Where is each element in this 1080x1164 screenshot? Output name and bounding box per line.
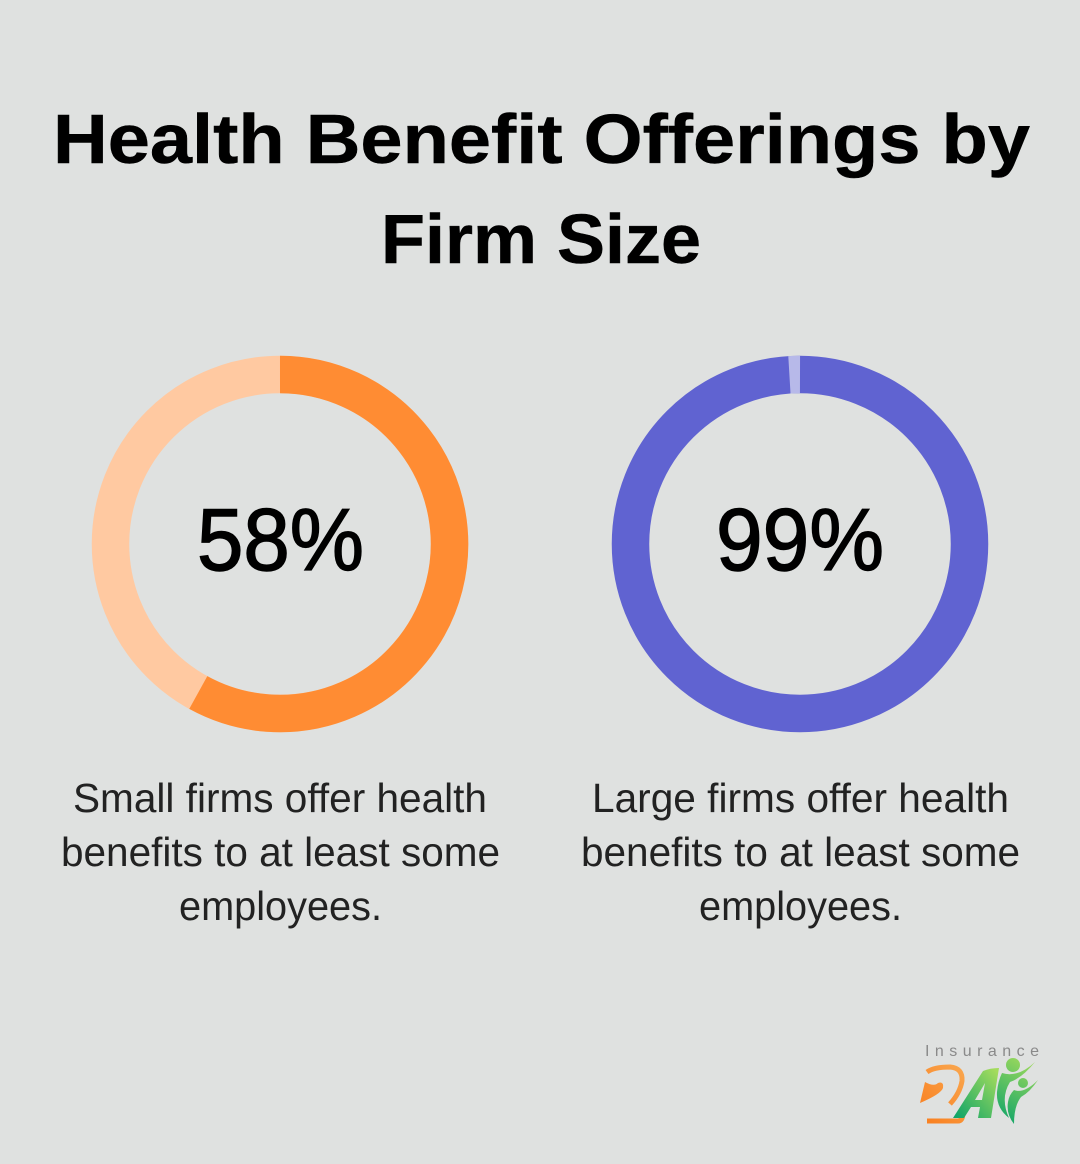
- stat: 58%: 58%: [197, 490, 364, 589]
- description: small firms: benefits to at least some: [61, 829, 500, 875]
- logo: Insurance 2A: Insurance: [925, 1043, 1039, 1060]
- description: small firms: employees.: [179, 883, 382, 929]
- title: [53, 100, 1030, 278]
- description: large firms: [581, 775, 1020, 929]
- title: Health Benefit Offerings by: [53, 100, 1030, 178]
- title: Firm Size: [381, 200, 701, 278]
- donut chart: 58%: [110, 374, 450, 714]
- description: large firms: employees.: [699, 883, 902, 929]
- description: large firms: Large firms offer health: [592, 775, 1009, 821]
- logo: Insurance 2A: [920, 1043, 1039, 1124]
- panel: large firms: [581, 374, 1020, 929]
- stat: 99%: 99%: [716, 490, 884, 589]
- panel: small firms: [61, 374, 500, 929]
- description: large firms: benefits to at least some: [581, 829, 1020, 875]
- description: small firms: Small firms offer health: [73, 775, 487, 821]
- donut chart: 99%: [630, 374, 970, 714]
- description: small firms: [61, 775, 500, 929]
